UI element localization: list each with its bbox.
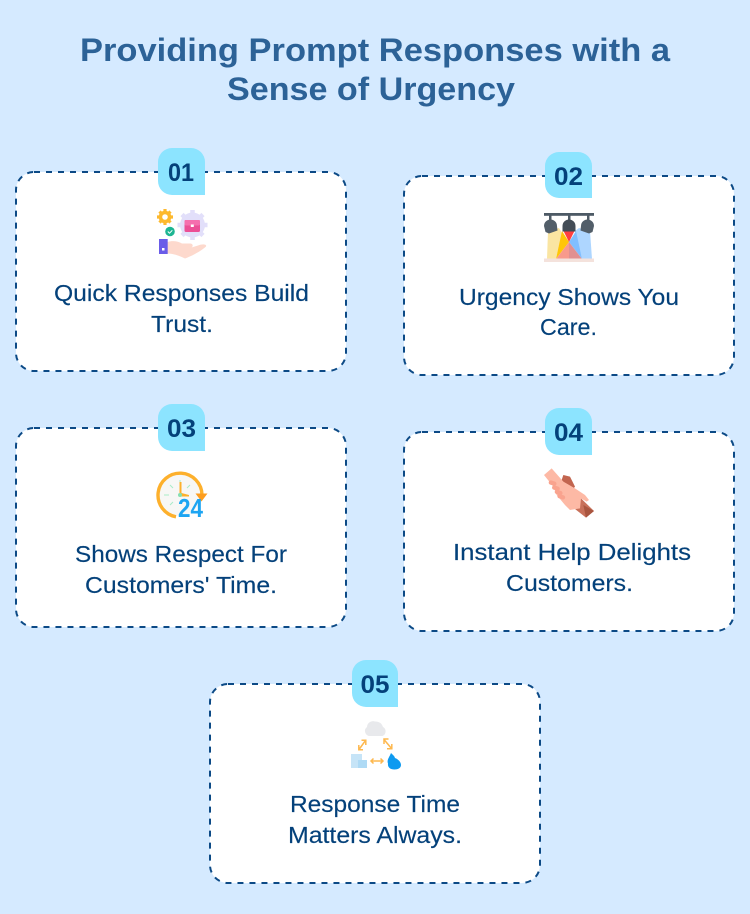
card 03 text <box>75 541 287 598</box>
card 03 text: Customers' Time. <box>85 572 277 598</box>
icon: hand holding gears and briefcase <box>157 209 208 258</box>
card 01 border <box>16 172 346 371</box>
card 04 text <box>453 539 691 596</box>
badge 05: 05 <box>360 671 390 699</box>
panel: card 03 <box>16 404 346 627</box>
card 05 text: Response Time <box>290 791 460 817</box>
card 04 text: Customers. <box>506 570 633 596</box>
card 01 text: Quick Responses Build <box>54 280 309 306</box>
badge 01 <box>158 148 205 195</box>
card 03 border <box>16 428 346 627</box>
title <box>80 32 670 107</box>
panel: card 05 <box>210 660 540 883</box>
badge 05 <box>352 660 398 707</box>
title: Sense of Urgency <box>227 71 515 107</box>
card 02 text: Urgency Shows You <box>459 284 679 310</box>
card 04 border <box>404 432 734 631</box>
title: Providing Prompt Responses with a <box>80 32 670 68</box>
icon: 24-hour clock <box>158 473 208 523</box>
card 02 text: Care. <box>540 314 597 340</box>
badge 03: 03 <box>167 415 196 443</box>
panel: card 04 <box>404 408 734 631</box>
panel: card 01 <box>16 148 346 371</box>
badge 02 <box>545 152 592 198</box>
card 05 text: Matters Always. <box>288 822 462 848</box>
icon: water cycle triangle <box>351 721 401 770</box>
badge 02: 02 <box>554 163 583 191</box>
card 04 text: Instant Help Delights <box>453 539 691 565</box>
card 01 text: Trust. <box>151 311 213 337</box>
card 02 border <box>404 176 734 375</box>
panel: card 02 <box>404 152 734 375</box>
card 05 text <box>288 791 462 848</box>
badge 01: 01 <box>168 159 194 187</box>
badge 04: 04 <box>554 419 583 447</box>
icon: spotlights <box>544 213 594 262</box>
icon: helping handshake <box>544 468 594 518</box>
badge 04 <box>545 408 592 455</box>
card 01 text <box>54 280 309 337</box>
icon: 24-hour clock: 24 <box>178 493 203 523</box>
card 03 text: Shows Respect For <box>75 541 287 567</box>
badge 03 <box>158 404 205 451</box>
card 05 border <box>210 684 540 883</box>
card 02 text <box>459 284 679 340</box>
